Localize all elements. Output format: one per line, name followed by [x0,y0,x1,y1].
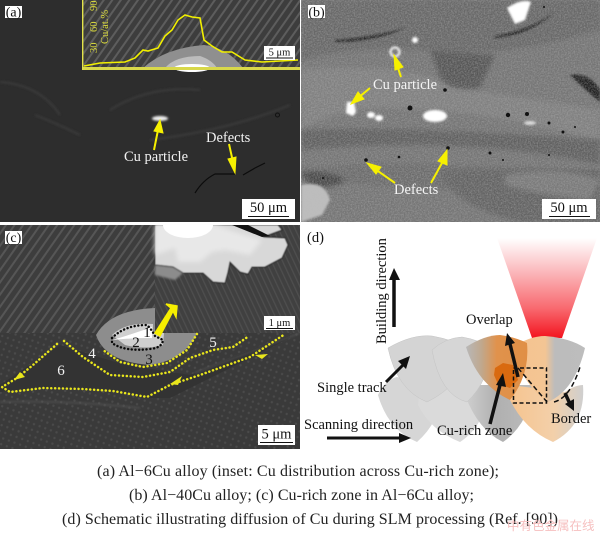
arrow: to defects [228,144,236,173]
scale bar 1 um: 1 μm [269,318,290,329]
panel: (d) schematic [301,225,600,450]
arrow: scanning direction [327,433,411,443]
arrow: to left defect [367,163,395,183]
inset scale bar: 5 μm [269,48,290,58]
scale bar 50 um: 50 μm [550,200,588,216]
label: scanning direction: Scanning direction [304,417,414,433]
inset axis label: 60 [89,22,100,32]
scale bar 5 um: 5 μm [262,426,292,442]
dashed box [514,368,546,403]
zone numbers: 5 [209,335,217,351]
upper tracks [388,335,585,402]
enlarged inset [155,212,300,333]
panel: (a) Al-6Cu micrograph [0,0,300,222]
caption: (b) Al−40Cu alloy; (c) Cu-rich zone in Al−6Cu alloy; [129,487,474,504]
bright Cu particles [346,1,536,125]
laser beam [497,238,597,338]
inset: Cu line profile [82,0,300,72]
label: overlap: Overlap [466,312,513,328]
label: single track: Single track [317,380,387,396]
caption: (a) Al−6Cu alloy (inset: Cu distribution across Cu-rich zone); [97,463,499,480]
caption [62,463,558,528]
inset axis label: 90 [89,0,100,11]
zone numbers: 3 [145,352,153,368]
arrow: to right defect [431,150,447,183]
zone numbers: 1 [143,325,151,341]
label: Cu particle: Cu particle [373,77,437,93]
inset axis label [89,0,111,53]
label: building direction: Building direction [374,237,390,344]
yellow dotted boundaries [2,334,285,397]
dashed border line [518,367,580,402]
label (c): (c) [6,231,22,246]
label (b): (b) [308,6,325,20]
zone numbers [58,328,216,375]
defects cracks [195,163,265,193]
panel: (b) Al-40Cu micrograph [301,0,600,222]
arrow: overlap [505,333,518,377]
scale bar 50 um [542,199,596,219]
scale bar 5 um [258,425,295,445]
arrow: zoom to inset [155,304,177,336]
Cu particle spot [152,116,168,121]
label (a): (a) [6,6,22,20]
watermark: 中有色金属在线 [507,518,595,533]
inset axis label: 30 [89,42,100,53]
label: Defects: Defects [206,130,251,146]
label (d): (d) [307,230,324,246]
yellow flow arrowheads [14,354,268,385]
panel: (c) Cu-rich zone micrograph [0,212,300,449]
lower tracks [378,377,583,442]
label: Cu-rich zone: Cu-rich zone [437,423,512,439]
Cu-rich zone blob [494,363,518,388]
scale bar 1 um [264,316,295,330]
inset scale bar [264,46,295,60]
inset axis label: Cu/at.% [100,10,111,44]
black dotted outline [112,325,163,350]
arrow: border [565,393,574,411]
label: Defects: Defects [394,182,439,198]
zone numbers: 6 [57,363,65,379]
arrow: to Cu particle [154,120,163,150]
arrow: to left Cu particle [351,88,370,104]
molten Cu-rich zone [96,308,197,365]
caption: (d) Schematic illustrating diffusion of Cu during SLM processing (Ref. [90]) [62,511,558,528]
scale bar 50 um: 50 μm [250,200,288,216]
pores [322,6,576,179]
zone numbers: 2 [132,335,140,351]
arrow: Cu-rich zone [490,373,506,424]
label: Cu particle: Cu particle [124,149,188,165]
label: border: Border [551,411,591,427]
zone numbers: 4 [88,346,96,362]
arrow: building direction [389,268,400,327]
arrow: to upper Cu particle [394,55,403,77]
arrow: single track [386,356,410,382]
scale bar 50 um [242,199,295,219]
